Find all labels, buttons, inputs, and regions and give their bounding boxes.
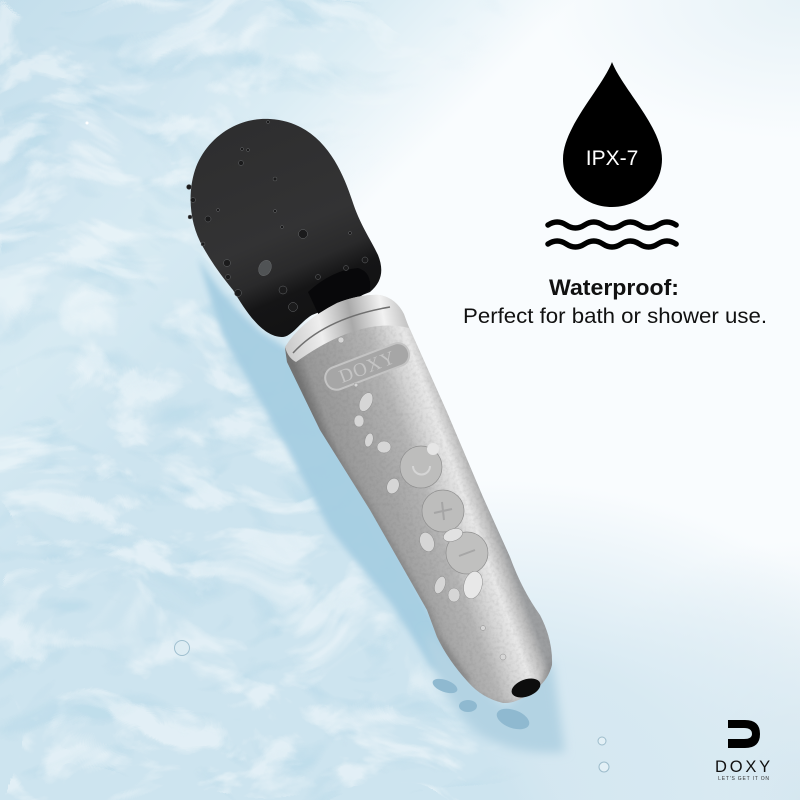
logo: DOXY: DOXY xyxy=(715,758,773,776)
head water drops xyxy=(186,120,368,312)
brushed metal grain xyxy=(361,326,538,698)
blue shadow band beside wand xyxy=(198,258,470,690)
blue water pool under wand tip xyxy=(425,630,565,753)
heading: Waterproof: Waterproof: xyxy=(549,275,679,300)
handle end shading xyxy=(285,352,556,710)
DOXY engraved badge xyxy=(322,340,412,393)
wand neck xyxy=(308,268,370,322)
charging port xyxy=(509,675,543,701)
power button xyxy=(400,443,442,488)
icon: IPX-7 water drop xyxy=(563,62,662,207)
wand silicone head xyxy=(186,119,381,337)
plus button xyxy=(422,490,464,532)
DOXY engraved badge: DOXY xyxy=(336,347,399,388)
text: description: Perfect for bath or shower use. xyxy=(463,305,767,328)
icon: waves xyxy=(548,222,676,247)
water bubbles xyxy=(174,640,190,656)
water droplets on handle xyxy=(338,337,506,660)
darker pool patches xyxy=(431,676,532,733)
logo: DOXY xyxy=(715,720,773,782)
background: water surface xyxy=(0,0,610,800)
product: massage wand xyxy=(186,119,560,710)
wand collar xyxy=(285,295,409,362)
icon: IPX-7 water drop: IPX-7 xyxy=(586,147,638,170)
logo: DOXY: LET'S GET IT ON xyxy=(718,776,770,782)
minus button xyxy=(446,532,488,574)
wand metal handle xyxy=(285,295,552,703)
